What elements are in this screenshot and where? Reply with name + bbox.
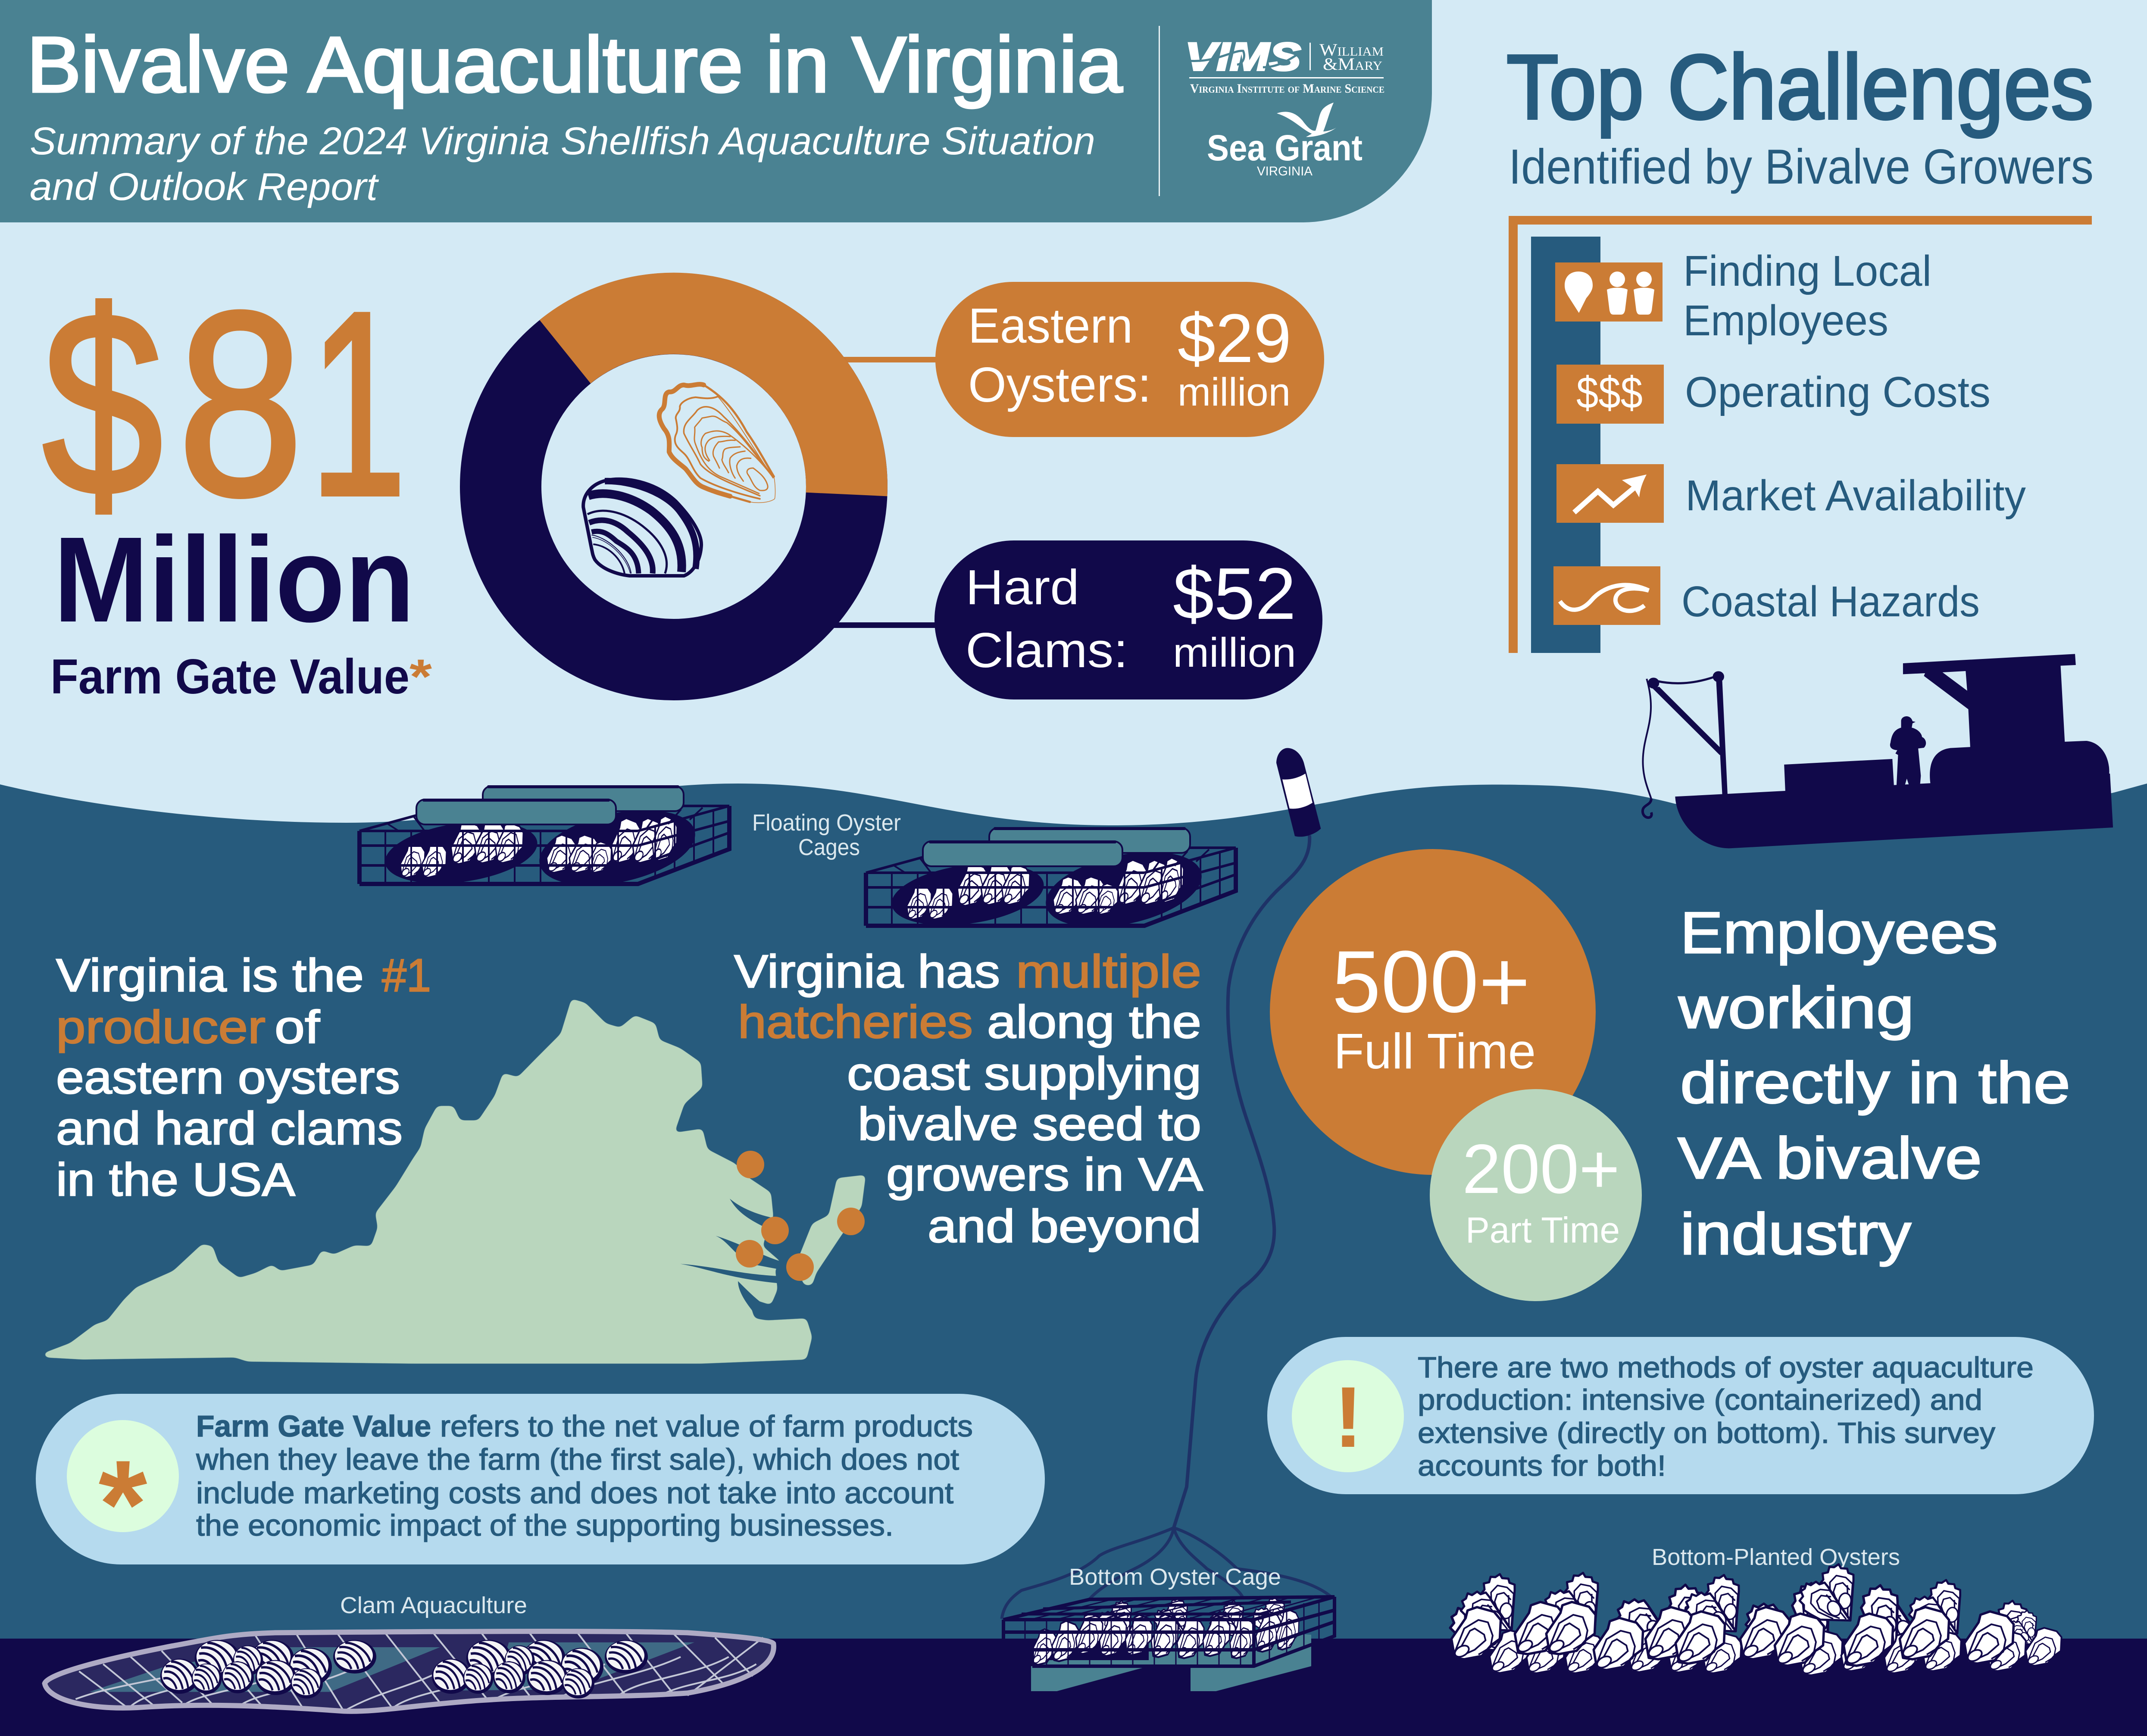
logo: Sea Grant Virginia: Sea Grant (1207, 128, 1363, 168)
definition text: refers to the net value of farm products (440, 1409, 973, 1443)
cages label: Floating Oyster (752, 810, 901, 836)
icon: asterisk (67, 1420, 179, 1574)
item: operating costs: Operating Costs (1685, 368, 1991, 416)
header banner (0, 0, 1432, 222)
definition text (196, 1409, 973, 1542)
icon: exclamation (1292, 1360, 1404, 1472)
subtitle (30, 120, 1095, 209)
subtitle: Summary of the 2024 Virginia Shellfish Aquaculture Situation (30, 120, 1095, 163)
panel: hard clams value: $52 (1173, 553, 1296, 635)
employees statement: VA bivalve (1678, 1125, 1982, 1191)
panel: top challenges (1506, 36, 2094, 653)
hatchery dots (736, 1151, 865, 1281)
employees statement: working (1678, 975, 1914, 1040)
full time circle: 500+ (1332, 933, 1530, 1031)
employees statement (1678, 900, 2070, 1267)
text: number one producer: Virginia is the (56, 949, 364, 1001)
text: number one producer (56, 949, 431, 1205)
bottom oyster cage (1002, 1528, 1334, 1691)
big number (42, 257, 406, 550)
title: Bivalve Aquaculture in Virginia (27, 20, 1122, 109)
logo: VIMS William & Mary: VIMS (1185, 35, 1301, 79)
panel: hard clams value: Clams: (966, 623, 1128, 678)
text: multiple hatcheries: along the (987, 996, 1201, 1048)
challenges heading: Top Challenges (1506, 36, 2094, 138)
text: multiple hatcheries: hatcheries (738, 996, 973, 1048)
farm gate label: Farm Gate Value (50, 649, 409, 704)
logo: Sea Grant Virginia: VIRGINIA (1257, 164, 1313, 178)
panel: employees (1270, 849, 2070, 1301)
text: multiple hatcheries: growers in VA (886, 1148, 1203, 1200)
big number: 1 (309, 257, 406, 550)
icon: clam shell (583, 479, 701, 576)
boat silhouette (1643, 654, 2113, 848)
logo: VIMS William & Mary (1185, 35, 1384, 96)
text: multiple hatcheries: multiple (1016, 945, 1201, 997)
callout: farm gate value definition (36, 1394, 1045, 1574)
panel: eastern oysters value: Oysters: (968, 358, 1151, 412)
blue bar (1531, 237, 1600, 653)
oyster cluster (1450, 1558, 2062, 1676)
icon: market arrow (1556, 464, 1664, 523)
icon: dollars: $$$ (1576, 368, 1643, 418)
buoy rope (1174, 835, 1309, 1528)
item: finding local employees: Employees (1683, 297, 1888, 345)
big number: 8 (178, 257, 303, 550)
panel: eastern oysters value: $29 (1178, 300, 1291, 377)
ocean water with wave top (0, 784, 2147, 1736)
seabed (0, 1639, 2147, 1736)
floating oyster cages (359, 785, 1236, 940)
text: number one producer: #1 (382, 949, 431, 1001)
callout text (1418, 1351, 2034, 1482)
icon: oyster shell (659, 384, 775, 503)
text: multiple hatcheries: Virginia has (734, 945, 1000, 997)
definition text: Farm Gate Value (196, 1409, 431, 1443)
farm gate value total (42, 257, 432, 704)
text: number one producer: eastern oysters (56, 1051, 400, 1103)
cage oysters (1032, 1594, 1299, 1664)
employees statement: directly in the (1680, 1050, 2070, 1115)
logo: VIMS William & Mary: William (1319, 40, 1384, 59)
challenges subheading: Identified by Bivalve Growers (1509, 140, 2094, 194)
cage one (359, 785, 729, 898)
callout text: accounts for both! (1418, 1449, 1666, 1482)
bottom planted label: Bottom-Planted Oysters (1652, 1544, 1900, 1570)
part time circle: Part Time (1466, 1210, 1620, 1250)
text: number one producer: of (275, 1001, 320, 1053)
icon: exclamation: ! (1334, 1369, 1363, 1465)
orange asterisk: * (409, 649, 432, 704)
cage two (866, 827, 1236, 940)
big number: $ (42, 257, 163, 550)
text: number one producer: and hard clams (56, 1102, 403, 1154)
full time circle: Full Time (1334, 1023, 1536, 1079)
definition text: the economic impact of the supporting businesses. (196, 1508, 894, 1542)
icon: wave (1553, 566, 1660, 625)
employees statement: industry (1680, 1201, 1911, 1267)
employees statement: Employees (1680, 900, 1998, 965)
text: multiple hatcheries: and beyond (928, 1200, 1201, 1252)
logo: VIMS William & Mary: &Mary (1323, 54, 1382, 74)
panel: eastern oysters value: million (1178, 370, 1291, 414)
part time circle: 200+ (1462, 1130, 1620, 1208)
panel: hard clams value (934, 540, 1322, 699)
icon: dollars (1556, 365, 1664, 424)
clam net bag (45, 1631, 774, 1711)
panel: hard clams value: million (1173, 630, 1296, 676)
definition text: when they leave the farm (the first sale), which does not (196, 1443, 959, 1476)
orange bracket (1509, 216, 2092, 653)
connector: clams (832, 622, 935, 628)
item: market availability: Market Availability (1685, 471, 2026, 520)
callout text: production: intensive (containerized) and (1418, 1383, 1982, 1416)
donut chart (501, 313, 847, 659)
cages label (752, 810, 901, 860)
text: number one producer: in the USA (56, 1153, 295, 1205)
panel: eastern oysters value: Eastern (968, 299, 1133, 353)
cage wire frame (1003, 1597, 1334, 1666)
definition text: include marketing costs and does not take into account (196, 1476, 953, 1510)
connector: oysters (841, 357, 938, 362)
item: coastal hazards: Coastal Hazards (1681, 578, 1980, 626)
bottom-planted oysters (1450, 1544, 2062, 1676)
logo: VIMS William & Mary: Virginia Institute of Marine Science (1190, 81, 1384, 96)
cage trays (1031, 1629, 1311, 1691)
callout text: There are two methods of oyster aquaculture (1418, 1351, 2034, 1384)
full time circle (1270, 849, 1596, 1175)
text: multiple hatcheries (734, 945, 1203, 1252)
callout text: extensive (directly on bottom). This survey (1418, 1417, 1995, 1449)
buoy (1276, 748, 1321, 837)
cage ropes (1002, 1528, 1331, 1619)
panel: eastern oysters value (935, 282, 1324, 437)
item: finding local employees (1683, 247, 1931, 345)
clams left group (160, 1640, 376, 1699)
logo: Sea Grant Virginia (1207, 103, 1363, 178)
icon: pin and people (1555, 262, 1663, 322)
cages label: Cages (798, 834, 860, 860)
bay inlets (680, 1199, 788, 1316)
text: number one producer: producer (56, 1001, 266, 1053)
item: finding local employees: Finding Local (1683, 247, 1931, 295)
icon: asterisk: * (99, 1434, 147, 1574)
clams right group (432, 1640, 648, 1699)
callout: two methods (1267, 1337, 2094, 1494)
panel: hard clams value: Hard (966, 560, 1079, 615)
million label: Million (53, 512, 415, 647)
text: multiple hatcheries: bivalve seed to (858, 1098, 1201, 1150)
header divider (1159, 26, 1160, 196)
virginia map (43, 999, 866, 1364)
clam label: Clam Aquaculture (340, 1592, 527, 1618)
clam aquaculture (45, 1592, 774, 1711)
bottom cage label: Bottom Oyster Cage (1069, 1564, 1281, 1590)
part time circle (1430, 1089, 1642, 1301)
subtitle: and Outlook Report (30, 165, 379, 209)
text: multiple hatcheries: coast supplying (847, 1047, 1201, 1099)
